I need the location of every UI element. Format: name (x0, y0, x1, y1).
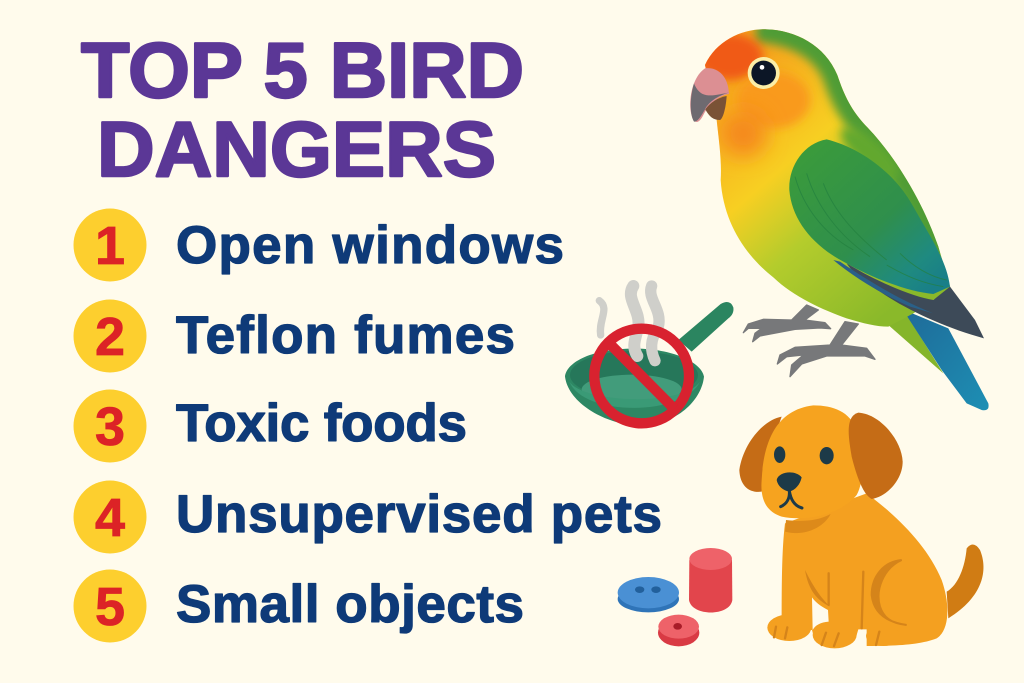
icon: parrot (690, 27, 989, 410)
parrot feet (743, 305, 875, 377)
title: TOP 5 BIRD (81, 26, 524, 114)
list item 2: teflon fumes (74, 300, 515, 372)
parrot body (705, 29, 951, 327)
puppy left ear (739, 417, 782, 492)
puppy paws (767, 614, 901, 648)
pan handle (678, 302, 733, 352)
parrot dark wing tip (847, 263, 984, 338)
steam (599, 286, 659, 361)
list item 1: open windows (74, 208, 564, 282)
red bead (658, 615, 699, 646)
parrot eye (748, 57, 780, 89)
list item 4: unsupervised pets: Unsupervised pets (176, 485, 662, 544)
list item 4: unsupervised pets: 4 (95, 488, 125, 548)
icon: non-stick pan with prohibition sign (565, 286, 733, 425)
list item 3: toxic foods: Toxic foods (176, 394, 467, 453)
list item 5: small objects (74, 570, 524, 642)
puppy tail (947, 545, 984, 618)
puppy head (761, 405, 862, 518)
puppy chest shadow (785, 514, 831, 533)
list item 3: toxic foods (74, 390, 467, 462)
parrot colour washes (697, 27, 943, 253)
gap between front legs (812, 597, 829, 630)
title (81, 26, 524, 193)
list item 5: small objects: 5 (95, 577, 125, 637)
puppy body (782, 493, 947, 646)
pan body (565, 349, 704, 425)
blue button (618, 577, 679, 612)
parrot beak (690, 68, 729, 122)
prohibition sign (594, 329, 689, 423)
parrot wing (789, 139, 950, 294)
list item 2: teflon fumes: Teflon fumes (176, 306, 515, 365)
icon: small objects (618, 548, 732, 646)
puppy face (774, 446, 834, 492)
list item 5: small objects: Small objects (176, 575, 524, 634)
list item 1: open windows: 1 (95, 216, 125, 276)
puppy right ear (849, 413, 903, 499)
title: DANGERS (97, 105, 496, 193)
list item 2: teflon fumes: 2 (95, 307, 125, 367)
parrot wing feathers (795, 173, 947, 287)
list item 1: open windows: Open windows (176, 216, 564, 275)
puppy paw and leg lines (774, 572, 879, 646)
icon: puppy (739, 405, 984, 648)
red cylinder (689, 548, 732, 612)
list item 3: toxic foods: 3 (95, 397, 125, 457)
parrot tail (888, 309, 943, 373)
list item 4: unsupervised pets (74, 480, 662, 554)
